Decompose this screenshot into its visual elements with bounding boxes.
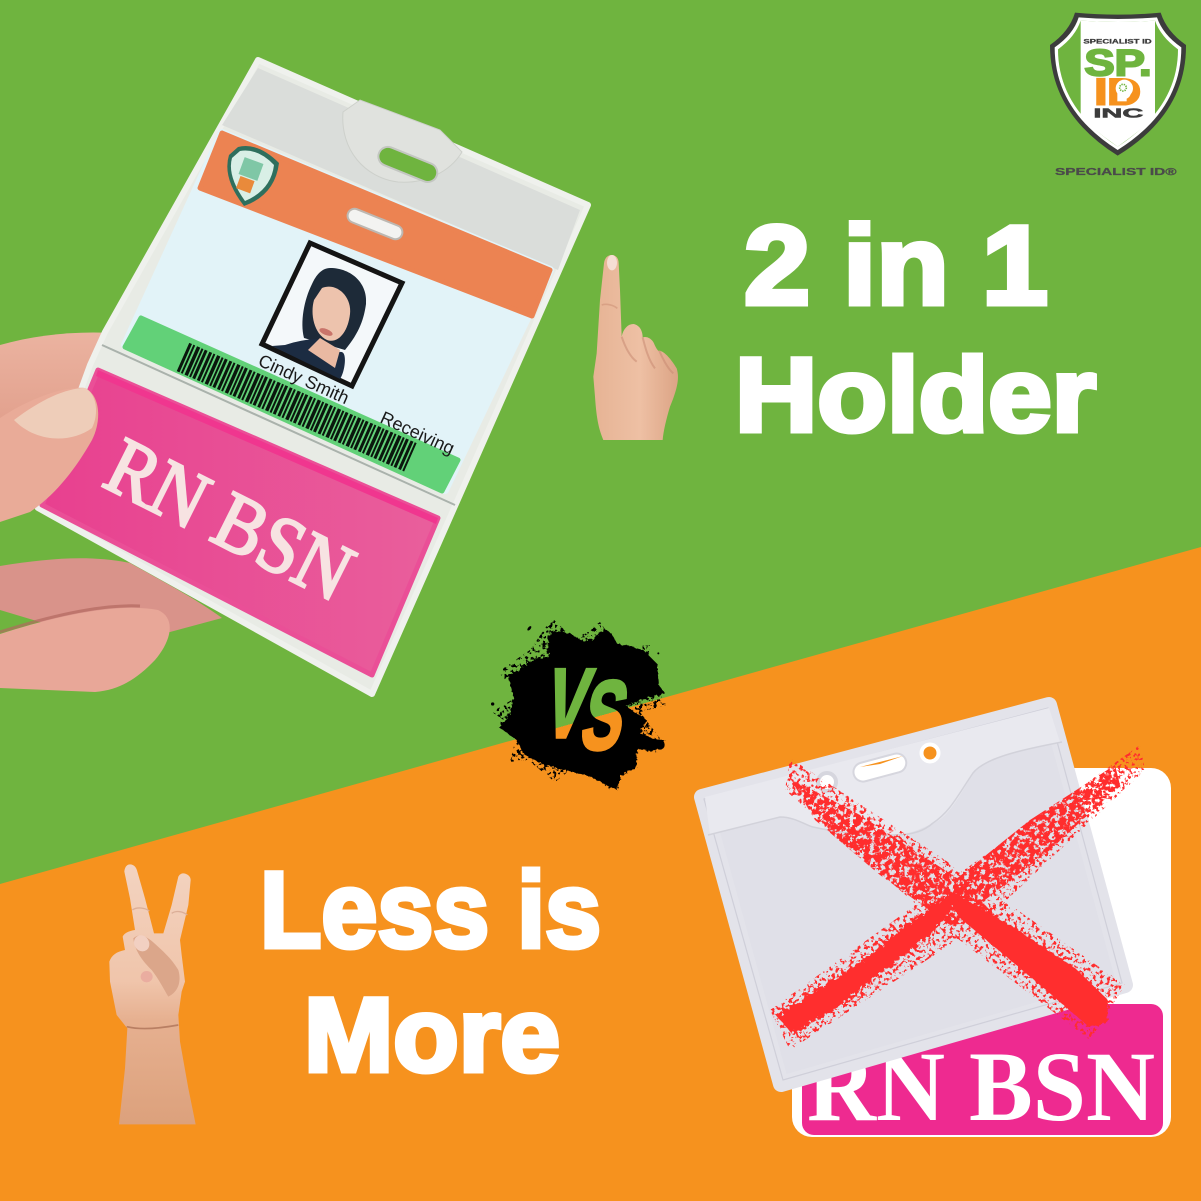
icon: hand showing one finger bbox=[593, 255, 678, 440]
flap edge bbox=[708, 742, 1062, 835]
dense mid band, stroke A bbox=[790, 778, 1000, 925]
card slot bbox=[345, 207, 405, 241]
heading: Less is: Less is bbox=[260, 849, 601, 970]
icon: hand showing two fingers bbox=[109, 864, 196, 1124]
department text: Receiving bbox=[377, 407, 458, 458]
icon: VS splat badge bbox=[491, 618, 668, 790]
photo: clear badge holder with ID card and pink RN BSN badge bbox=[38, 60, 588, 694]
heading: 2 in 1: 2 in 1 bbox=[744, 203, 1048, 328]
VS lettering: S bbox=[573, 660, 637, 770]
hole right bbox=[922, 744, 938, 762]
VS lettering: V bbox=[536, 648, 600, 758]
heading: Holder: Holder bbox=[735, 337, 1096, 454]
solid core, stroke A lower bbox=[945, 888, 1108, 1026]
photo: white card with RN BSN badge bbox=[792, 768, 1171, 1142]
wide speckled spray, stroke B bbox=[770, 745, 1145, 1050]
photo: hand fingers behind holder bbox=[0, 332, 222, 692]
slot orange sliver bbox=[860, 756, 903, 767]
logo head icon bbox=[1116, 80, 1133, 101]
holder notch tab bbox=[343, 100, 462, 182]
holder slot bbox=[376, 144, 440, 185]
badge label: RN BSN bbox=[807, 1031, 1155, 1142]
dense mid band, stroke B bbox=[950, 765, 1120, 915]
slot bbox=[851, 751, 908, 784]
sleeve inner seam bbox=[704, 708, 1122, 1080]
card orange band bbox=[200, 133, 550, 316]
heading: More: More bbox=[304, 977, 560, 1094]
logo small name: SPECIALIST ID bbox=[1083, 39, 1152, 46]
photo: empty clear vinyl holder bbox=[702, 705, 1125, 1084]
cardholder name: Cindy Smith bbox=[255, 350, 352, 408]
fold line bbox=[102, 345, 455, 505]
logo SP letters: SP. bbox=[1084, 41, 1152, 83]
logo INC: INC bbox=[1093, 106, 1143, 120]
ink splat core bbox=[491, 625, 665, 790]
background: orange diagonal section bbox=[0, 547, 1201, 1201]
upper flap bbox=[705, 708, 1060, 835]
pink RN BSN badge bbox=[42, 370, 438, 675]
holder top pocket bbox=[200, 68, 580, 270]
barcode bbox=[183, 357, 412, 458]
pink badge strip bbox=[802, 1004, 1163, 1135]
holder outer sleeve bbox=[38, 60, 588, 694]
ink splat spray bbox=[492, 618, 668, 790]
sleeve bbox=[702, 705, 1125, 1084]
logo ID letters: ID bbox=[1094, 70, 1141, 112]
card green band bbox=[125, 318, 458, 491]
icon: red brush X bbox=[770, 745, 1145, 1050]
shield white rim bbox=[1055, 17, 1181, 150]
solid core, stroke B lower bbox=[776, 885, 965, 1034]
wide speckled spray, stroke A bbox=[785, 758, 1125, 1040]
logo wordmark: SPECIALIST ID® bbox=[1055, 167, 1178, 178]
portrait photo bbox=[262, 243, 402, 386]
logo: Specialist ID shield bbox=[1050, 13, 1186, 178]
shield inner green bbox=[1058, 21, 1178, 147]
badge label: RN BSN bbox=[92, 420, 368, 619]
ID card bbox=[125, 133, 550, 491]
hole left bbox=[818, 773, 836, 791]
photo: thumb in front of holder bbox=[0, 388, 98, 522]
card white body bbox=[125, 133, 550, 490]
shield white centre bbox=[1081, 21, 1155, 147]
shield outline bbox=[1050, 13, 1186, 156]
card logo bbox=[227, 146, 279, 206]
